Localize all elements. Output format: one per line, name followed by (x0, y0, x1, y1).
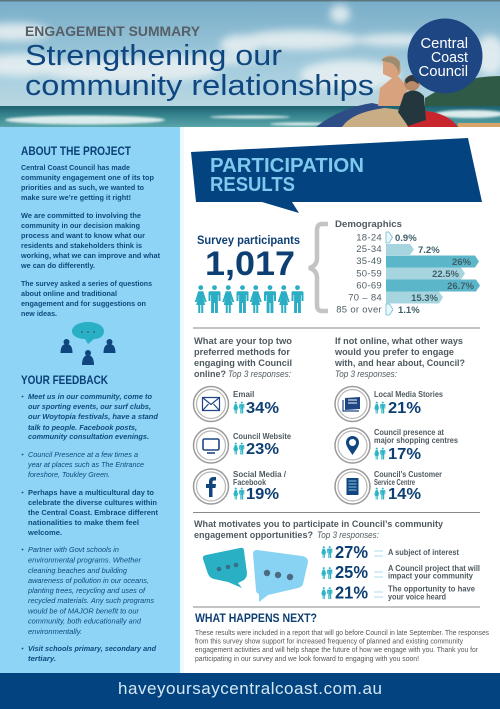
chart: demographics: 22.5% (432, 269, 460, 280)
question: other ways: If not online, what other ways (335, 336, 463, 347)
list: feedback bullets (22, 392, 159, 663)
question: motivation: What motivates you to participate in Council’s community (194, 519, 444, 530)
text: about paragraph 3: The survey asked a series of questions (21, 279, 152, 288)
text: about paragraph 1: community engagement one of its top (21, 173, 155, 182)
chart: demographics: 25-34 (356, 244, 382, 255)
response: customer service centre 14%: 14% (388, 486, 421, 503)
logo: Central Coast Council: Coast (431, 50, 468, 66)
bullet 4: Partner with Govt schools in (28, 545, 119, 554)
icon: people around speech bubble (60, 322, 116, 365)
chart: demographics: 26% (452, 257, 472, 268)
bullet 5: tertiary. (28, 654, 56, 663)
question: other ways: would you prefer to engage (334, 347, 454, 358)
question: online methods: Top 3 responses: (228, 369, 291, 380)
question: online methods: online? (194, 369, 226, 380)
stat: 25% council project: impact your community (388, 572, 474, 580)
text: about paragraph 2: community in our decision making (21, 221, 140, 230)
bullet 2: foreshore, Toukley Green. (28, 470, 110, 479)
response: shopping centres 17%: major shopping centres (374, 436, 459, 445)
chart: demographics: Demographics (335, 219, 402, 229)
response: email 34% (194, 386, 279, 422)
bullet 4: would be of MAJOR benefit to our (28, 606, 140, 616)
question: online methods: engaging with Council (194, 358, 292, 369)
chart: demographics: 35-49 (356, 256, 382, 267)
survey participants stat (195, 235, 304, 313)
chart: demographics: 7.2% (418, 245, 440, 256)
chart: demographics: 18-24 (356, 232, 382, 244)
text: about paragraph 2: we can do differently. (20, 261, 95, 270)
title: community relationships (25, 70, 374, 102)
banner: participation results: PARTICIPATION (210, 154, 364, 177)
text: next steps paragraph: engagement activities and will help shape the future of how we engage with you. Thank you for (195, 647, 479, 654)
bullet 3: the Central Coast. Embrace different (28, 508, 159, 517)
stat: 27% subject of interest: 27% (335, 542, 368, 562)
chart: demographics: 1.1% (398, 305, 420, 316)
response: council website 23%: 23% (246, 441, 279, 458)
response: social media 19%: Facebook (233, 478, 266, 487)
banner: participation results: RESULTS (210, 173, 295, 196)
question: online methods: What are your top two (194, 336, 292, 347)
stat: 21% voice heard: The opportunity to have (388, 584, 476, 594)
bullet 1: talk to people. Facebook posts, (28, 423, 137, 432)
stat: 27% subject of interest: A subject of interest (388, 548, 459, 557)
banner: participation results (191, 138, 482, 213)
response: customer service centre 14% (335, 469, 442, 504)
chart: demographics (335, 219, 480, 316)
bullet 1: our Woytopia festivals, have a stand (28, 412, 159, 421)
text: about paragraph 3: about online and traditional (21, 289, 117, 298)
surfboard (316, 103, 458, 127)
chart: demographics: 70 – 84 (348, 292, 382, 304)
text: about paragraph 1: make sure we’re getting it right! (21, 193, 131, 202)
response: local media stories 21% (335, 386, 443, 422)
heading: about the project: ABOUT THE PROJECT (21, 144, 132, 158)
bullet 4: community, both educationally and (28, 616, 142, 626)
bullet 4: environmental programs. Whether (28, 556, 142, 564)
footer: website: haveyoursaycentralcoast.com.au (118, 679, 382, 698)
text: about paragraph 2: process and want to know what our (21, 231, 145, 240)
title: Strengthening our (25, 40, 282, 72)
logo: Central Coast Council: Central (420, 36, 468, 52)
response: shopping centres 17%: Council presence at (374, 428, 444, 437)
chart: demographics: 15.3% (411, 293, 439, 304)
text: next steps paragraph: participating in our survey and we look forward to engaging with you soon! (195, 656, 419, 663)
text: about paragraph 2: working, what we can improve and what (20, 251, 161, 260)
bullet 2: year at places such as The Entrance (27, 460, 144, 469)
bullet 4: recycled materials. Any such programs (28, 596, 154, 605)
bullet 5: Visit schools primary, secondary and (28, 644, 157, 653)
text: about paragraph 2: We are committed to involving the (21, 211, 141, 220)
stat: 21% voice heard: 21% (335, 582, 368, 602)
text: about paragraph 1: Central Coast Council has made (21, 163, 130, 172)
stat: 21% voice heard: your voice heard (388, 592, 446, 602)
panel: left sidebar (0, 127, 184, 673)
response: council website 23%: Council Website (233, 432, 292, 441)
stat: 21% voice heard (321, 582, 476, 602)
bullet 3: welcome. (27, 528, 62, 537)
response: shopping centres 17%: 17% (388, 446, 421, 463)
footer: website (0, 673, 500, 709)
surfers (378, 55, 426, 126)
response: local media stories 21%: 21% (388, 400, 421, 417)
question: other ways: Top 3 responses: (335, 369, 397, 380)
stat: 25% council project: 25% (335, 562, 368, 582)
label: engagement summary: ENGAGEMENT SUMMARY (25, 23, 201, 39)
response: social media 19%: Social Media / (233, 470, 287, 479)
text: next steps paragraph: from this survey show support for increased frequency of planned and existing community (195, 638, 463, 646)
survey participants stat: Survey participants (197, 235, 300, 247)
survey participants stat: 1,017 (205, 245, 295, 283)
icon: row of people (195, 285, 304, 313)
response: shopping centres 17% (335, 428, 459, 463)
stat: 25% council project: A Council project that will (388, 564, 480, 573)
icon: light blue speech bubble (253, 550, 308, 602)
bullet 4: environmentally. (28, 627, 82, 636)
bullet 3: Perhaps have a multicultural day to (28, 488, 155, 497)
bullet 4: awareness of pollution in our oceans, (28, 576, 149, 585)
bullet 1: Meet us in our community, come to (28, 392, 153, 401)
response: social media 19% (194, 469, 287, 504)
chart: demographics: 26.7% (447, 281, 475, 292)
bullet 2: Council Presence at a few times a (28, 450, 138, 459)
response: local media stories 21%: Local Media Stories (374, 390, 443, 399)
chart: demographics: 85 or over (336, 304, 382, 316)
bullet 4: planting trees, recycling and uses of (27, 586, 146, 595)
text: about paragraph 3: engagement and for suggestions on (21, 299, 146, 308)
question: online methods: preferred methods for (194, 347, 290, 358)
bullet 1: community consultation evenings. (28, 432, 149, 441)
logo: Central Coast Council: Council (418, 64, 468, 80)
question: motivation: engagement opportunities? (194, 530, 313, 541)
response: customer service centre 14%: Service Centre (374, 478, 415, 487)
icon: teal speech bubble (203, 548, 247, 588)
stat: 27% subject of interest (321, 542, 459, 562)
question: other ways: with, and hear about, Council? (334, 358, 465, 369)
response: customer service centre 14%: Council’s Customer (374, 470, 442, 479)
chart: demographics: 0.9% (395, 233, 417, 244)
header photo: beach scene (0, 0, 500, 127)
bullet 4: cleaning beaches and building (28, 566, 127, 575)
brace (309, 224, 328, 311)
bullet 3: celebrate the diverse cultures within (28, 498, 157, 507)
response: social media 19%: 19% (246, 486, 279, 503)
heading: your feedback: YOUR FEEDBACK (21, 373, 108, 387)
text: about paragraph 3: new ideas. (21, 309, 57, 318)
response: email 34%: Email (233, 390, 254, 399)
chart: demographics: 60-69 (356, 280, 382, 292)
stat: 25% council project (321, 562, 480, 582)
heading: what happens next: WHAT HAPPENS NEXT? (195, 611, 317, 625)
text: about paragraph 2: residents and stakeholders think is (21, 241, 142, 250)
chart: demographics: 50-59 (356, 268, 382, 280)
text: about paragraph 1: priorities and as such, we wanted to (21, 183, 145, 192)
text: next steps paragraph: These results were included in a report that will go before Council in late September. The responses (195, 630, 489, 637)
question: motivation: Top 3 responses: (317, 530, 379, 541)
response: email 34%: 34% (246, 400, 279, 417)
bullet 3: nationalities to make them feel (28, 518, 139, 527)
logo: Central Coast Council (408, 18, 482, 94)
response: council website 23% (194, 428, 292, 463)
bullet 1: our sporting events, our surf clubs, (28, 402, 151, 411)
